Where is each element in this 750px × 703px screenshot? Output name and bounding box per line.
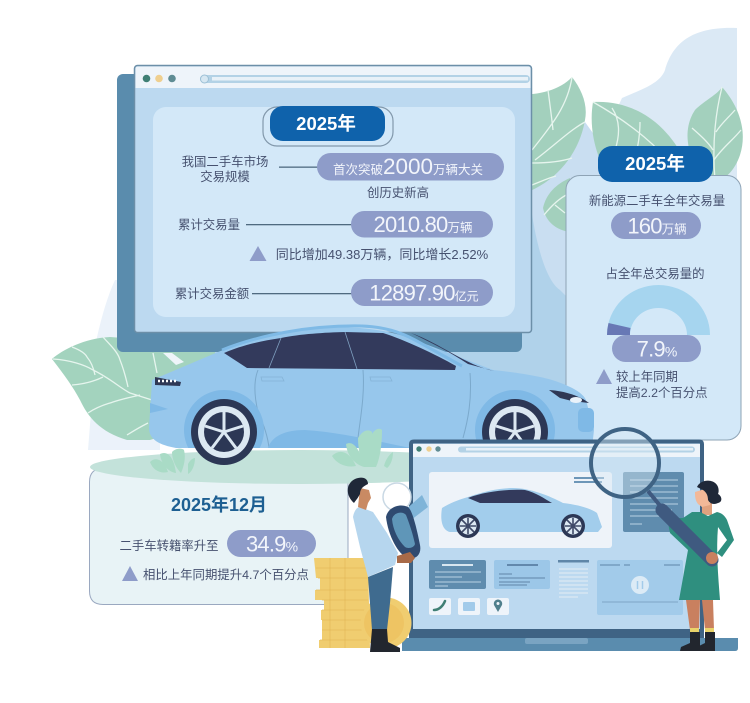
fob panel bbox=[392, 513, 415, 548]
legs bbox=[686, 600, 714, 630]
pill: breaks 20 million: 首次突破2000万辆大关 bbox=[333, 154, 483, 179]
door lines bbox=[255, 370, 471, 448]
connector line 2 bbox=[246, 224, 352, 225]
background blob: top right bbox=[600, 28, 737, 300]
rear window strip bbox=[411, 333, 494, 371]
head lamp bbox=[549, 390, 589, 403]
video card bbox=[597, 560, 683, 615]
text column bbox=[558, 560, 589, 597]
leaf: top centre bbox=[515, 77, 586, 195]
pill: cumulative volume: 2010.80万辆 bbox=[374, 212, 472, 237]
hand bbox=[706, 552, 718, 564]
key ring bbox=[383, 483, 411, 511]
leaf: left of car bbox=[52, 337, 215, 440]
magnifier handle bbox=[662, 510, 712, 560]
pill: 34.9 percent bbox=[227, 530, 316, 557]
window buttons bbox=[143, 75, 176, 82]
text card right bbox=[623, 472, 684, 532]
listing rating bars bbox=[574, 478, 604, 482]
connector line 3 bbox=[252, 293, 352, 294]
note: record high: 创历史新高 bbox=[367, 185, 429, 200]
roof edge bbox=[222, 326, 462, 366]
key fob bbox=[386, 505, 420, 558]
ground ellipse bbox=[90, 450, 510, 484]
background blob: pale blue around leaves bbox=[525, 115, 605, 300]
address bar bbox=[200, 75, 530, 83]
pill: 7.9 percent: 7.9% bbox=[637, 336, 677, 362]
face bbox=[358, 488, 371, 510]
pill: 34.9 percent: 34.9% bbox=[246, 532, 298, 556]
pill: 7.9 percent bbox=[612, 335, 701, 362]
year badge: 2025年 bbox=[625, 153, 685, 174]
dress bbox=[667, 512, 734, 600]
window title bar bbox=[136, 66, 530, 88]
front wheel bbox=[482, 399, 548, 465]
laptop hinge bbox=[409, 629, 704, 638]
pill: 1.6 million: 160万辆 bbox=[627, 214, 687, 238]
year badge bbox=[270, 106, 385, 141]
label: market scale: 交易规模 bbox=[200, 169, 250, 184]
label: cumulative amount: 累计交易金额 bbox=[175, 286, 250, 301]
triangle: increase bbox=[596, 369, 612, 384]
background blob: pale left bbox=[88, 280, 160, 450]
heading: 2025年12月 bbox=[171, 494, 267, 515]
rear wheel bbox=[191, 399, 257, 465]
magnifier bbox=[591, 429, 662, 508]
hair bbox=[348, 478, 368, 503]
pill: cumulative volume bbox=[351, 211, 493, 238]
icon: phone bbox=[429, 598, 451, 615]
boots bbox=[370, 629, 400, 652]
connector line 1 bbox=[279, 166, 319, 168]
car listing card bbox=[429, 472, 612, 548]
window frame bbox=[134, 66, 532, 332]
background blob: blue beneath window bbox=[180, 330, 540, 440]
face bbox=[695, 488, 710, 507]
car body bbox=[149, 327, 594, 448]
label: cumulative volume: 累计交易量 bbox=[178, 217, 240, 232]
laptop bbox=[402, 442, 738, 651]
laptop base bbox=[402, 638, 738, 651]
panel background bbox=[90, 468, 348, 604]
gauge chart bbox=[607, 285, 710, 335]
year badge outline bbox=[263, 107, 393, 146]
socks bbox=[690, 628, 714, 632]
icon: mail bbox=[458, 598, 480, 615]
laptop buttons bbox=[416, 446, 441, 452]
note: points increase: 较上年同期 bbox=[616, 369, 678, 384]
note: points increase bbox=[616, 369, 708, 400]
label: share of total: 占全年总交易量的 bbox=[605, 266, 705, 281]
laptop screen bbox=[411, 442, 702, 636]
triangle: increase bbox=[122, 566, 138, 581]
note: year on year: 同比增加49.38万辆，同比增长2.52% bbox=[276, 247, 489, 262]
neck bbox=[702, 503, 712, 515]
icon: location pin bbox=[487, 598, 509, 615]
car: large illustration bbox=[149, 326, 594, 465]
head lamp light bbox=[570, 397, 582, 403]
text card light bbox=[494, 560, 550, 589]
panel: main browser window bbox=[134, 66, 532, 332]
pill: cumulative amount: 12897.90亿元 bbox=[369, 280, 479, 306]
windows bbox=[224, 332, 456, 370]
lower sill shade bbox=[268, 430, 411, 448]
laptop title bar bbox=[413, 444, 700, 457]
small car bbox=[441, 488, 602, 538]
label: transfer rate: 二手车转籍率升至 bbox=[119, 538, 219, 553]
hand bbox=[397, 552, 415, 563]
rear reflector bbox=[150, 403, 168, 413]
label: market scale: 我国二手车市场 bbox=[182, 154, 268, 169]
triangle: increase bbox=[250, 246, 266, 261]
panel: December transfer rate bbox=[90, 468, 348, 604]
hair bbox=[697, 481, 721, 504]
year badge: 2025年 bbox=[296, 113, 356, 134]
coins stack bbox=[314, 558, 370, 648]
leaf: top right outer bbox=[688, 87, 743, 182]
hinge notch bbox=[525, 638, 588, 644]
front bumper panel bbox=[578, 408, 594, 432]
woman with magnifier bbox=[662, 481, 734, 651]
tail lamp bbox=[155, 377, 181, 386]
window pillars bbox=[269, 332, 357, 369]
label: market scale bbox=[182, 154, 268, 184]
note: points increase: 相比上年同期提升4.7个百分点 bbox=[143, 567, 309, 582]
inner content panel bbox=[153, 107, 515, 317]
man with car key bbox=[348, 478, 428, 652]
big coin bbox=[360, 598, 412, 648]
background blob: blue right of window bbox=[515, 170, 575, 440]
panel background bbox=[566, 176, 741, 440]
plant: right bbox=[332, 429, 393, 468]
text card dark bbox=[429, 560, 486, 589]
plant: left bbox=[150, 449, 195, 474]
note: points increase: 提高2.2个百分点 bbox=[616, 385, 708, 400]
lens glass bbox=[591, 429, 659, 497]
year badge bbox=[598, 146, 713, 182]
shirt bbox=[353, 507, 398, 577]
boots bbox=[680, 632, 715, 651]
tail lamp dots bbox=[158, 380, 177, 382]
browser window shadow bbox=[117, 74, 522, 352]
wheel arches bbox=[184, 390, 555, 448]
key tag bbox=[403, 495, 428, 520]
label: annual volume: 新能源二手车全年交易量 bbox=[589, 193, 725, 208]
door handles bbox=[261, 377, 392, 381]
trousers bbox=[368, 567, 393, 630]
panel: new energy used cars bbox=[566, 146, 741, 440]
pill: 1.6 million bbox=[611, 212, 701, 239]
leaf: lower small bbox=[543, 178, 570, 232]
handle neck bbox=[648, 491, 662, 508]
leaf: top right inner bbox=[592, 102, 682, 165]
laptop address bar bbox=[458, 446, 695, 452]
